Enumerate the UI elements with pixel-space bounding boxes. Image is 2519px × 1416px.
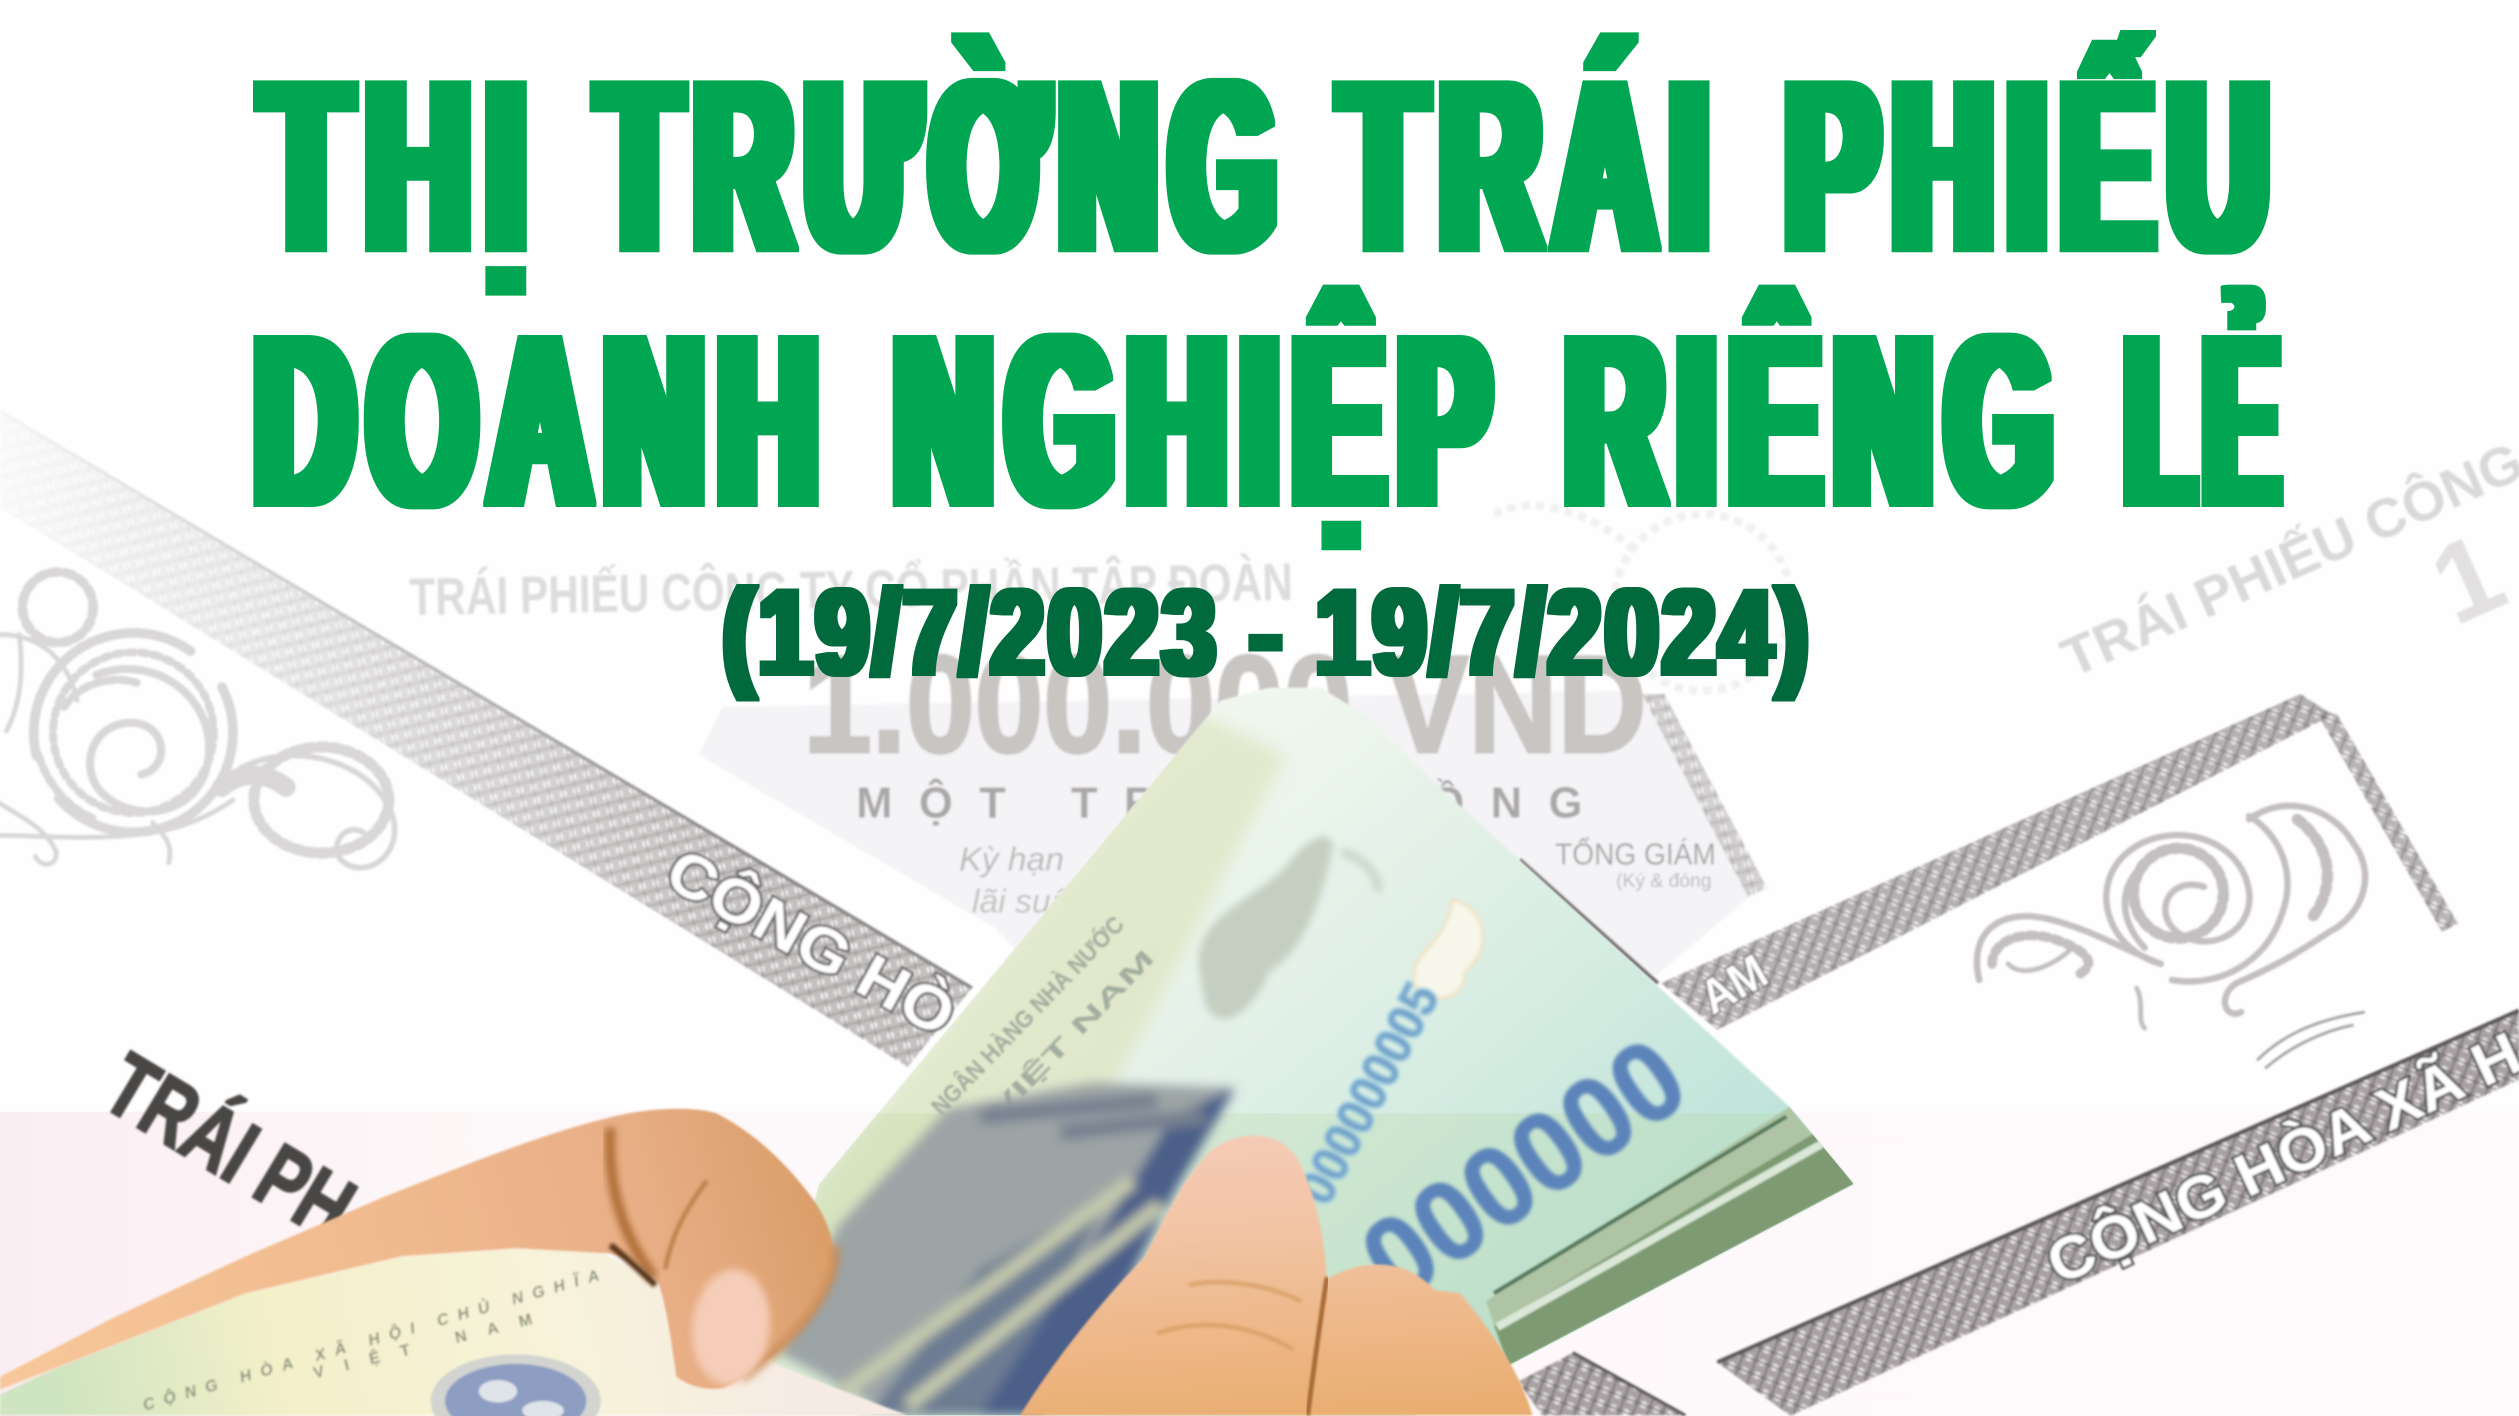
icon: lower tint <box>755 1113 1880 1416</box>
icon: small seal <box>2257 1012 2365 1068</box>
title line 2: DOANH <box>255 285 832 556</box>
icon: banknote stack <box>755 688 1880 1416</box>
panel: centre bond certificate <box>409 506 1791 983</box>
icon: engraving panel <box>779 1083 1235 1415</box>
text: note serial: 000000005 <box>1285 973 1450 1213</box>
icon: right ornament <box>1977 806 2365 1028</box>
panel: right bond certificate <box>1518 430 2519 1415</box>
title line 1: TRÁI <box>1341 31 1723 302</box>
text: right bond value: 1 <box>2413 508 2519 648</box>
icon: note left edge tint <box>815 714 1286 1240</box>
text: certificate value in words: MỘT TRIỆU ĐỒNG <box>856 779 1582 828</box>
text: dark bond title: TRÁI PH <box>88 1034 371 1260</box>
icon: blue seal <box>431 1354 601 1416</box>
icon: back banknote <box>0 1248 908 1416</box>
text: bank name on note: NGÂN HÀNG NHÀ NƯỚC <box>926 911 1130 1121</box>
text: band lettering top right: AM <box>1691 944 1776 1025</box>
text: note title: VIỆT NAM <box>983 944 1160 1126</box>
title <box>255 31 2289 556</box>
icon: left hand <box>0 1109 836 1390</box>
icon: left thumbnail <box>687 1265 775 1389</box>
text: LẺ <box>2126 285 2289 556</box>
icon: left ornament <box>0 572 395 868</box>
icon: portrait watermark <box>1198 837 1378 1019</box>
icon: stack side edge <box>1486 1107 1854 1366</box>
title line 1 <box>262 31 2283 302</box>
panel: left bond certificate <box>0 402 972 1260</box>
title line 1: THỊ <box>262 31 541 302</box>
text: certificate value: 1.000.000 VND <box>803 628 1647 782</box>
text: certificate heading: TRÁI PHIẾU CÔNG TY CỔ PHẦN TẬP ĐOÀN <box>409 551 1293 627</box>
icon: right hand <box>1020 1136 1533 1415</box>
text: note denomination: 000000 <box>1339 1014 1708 1324</box>
text: right bond heading: TRÁI PHIẾU CÔNG <box>2052 430 2519 689</box>
icon: flower <box>1414 900 1483 998</box>
text: back note country: VIỆT NAM <box>311 1309 534 1382</box>
text: band lettering right: CỘNG HÒA XÃ H <box>2037 1019 2519 1297</box>
title line 2: RIÊNG <box>1566 285 2066 556</box>
title line 2 <box>255 285 2289 556</box>
text: certificate interest: lãi suất <box>972 883 1080 921</box>
text: back note legend: CỘNG HÒA XÃ HỘI CHỦ NGHĨA <box>140 1265 601 1414</box>
title line 1: TRƯỜNG <box>598 31 1289 302</box>
text: certificate signature note: (Ký & đóng <box>1616 871 1711 892</box>
title line 2: NGHIỆP <box>894 285 1504 556</box>
text: certificate signature: TỔNG GIÁM <box>1555 835 1716 871</box>
text: certificate terms: Kỳ hạn <box>959 841 1064 879</box>
icon: white band lettering: CỘNG HÒ <box>656 835 967 1049</box>
date range: (19/7/2023 - 19/7/2024) <box>723 564 1812 701</box>
